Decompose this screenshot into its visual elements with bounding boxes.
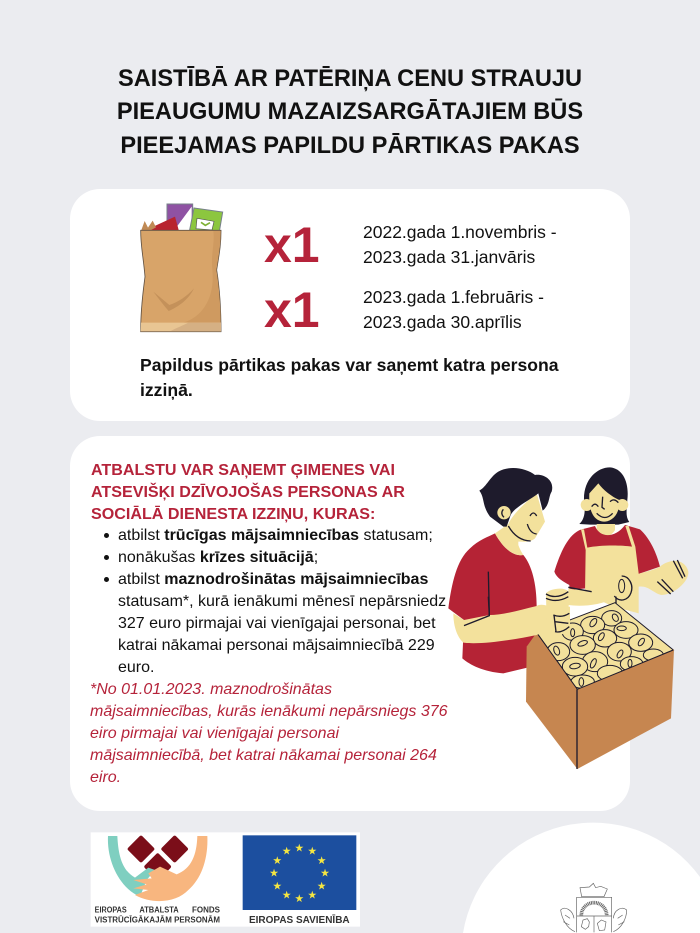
eligibility list: nonākušas krīzes situācijā; (118, 549, 318, 566)
eligibility list: statusam*, kurā ienākumi mēnesī nepārsniedz (118, 593, 446, 610)
logo: EU support fund and EU flag: ★ (295, 892, 304, 905)
note: one package per person: Papildus pārtikas pakas var saņemt katra persona (140, 355, 559, 375)
eligibility list: atbilst trūcīgas mājsaimniecības statusam; (118, 527, 433, 544)
footnote: eiro. (90, 769, 121, 786)
eligibility heading (91, 461, 405, 523)
date range second: 2023.gada 1.februāris - (363, 287, 544, 307)
panel: food packages (70, 189, 630, 421)
footnote: eiro pirmajai vai vienīgajai personai (90, 725, 339, 742)
woman (554, 467, 688, 613)
eligibility list: 327 euro pirmajai vai vienīgajai personai, bet (118, 615, 436, 632)
eligibility list: euro. (118, 659, 154, 676)
logo: EU support fund and EU flag: ★ (269, 867, 279, 880)
logo: EU support fund and EU flag: ATBALSTA (139, 906, 179, 915)
logo: EU support fund and EU flag: ★ (273, 879, 282, 892)
man (448, 468, 552, 673)
box of cans (537, 603, 673, 689)
eligibility heading: SOCIĀLĀ DIENESTA IZZIŅU, KURAS: (91, 505, 375, 523)
title: PIEEJAMAS PAPILDU PĀRTIKAS PAKAS (120, 132, 580, 158)
man's forearm and can (453, 589, 570, 643)
date range first: 2022.gada 1.novembris - (363, 222, 557, 242)
logo: EU support fund and EU flag: ★ (317, 879, 326, 892)
date range second: 2023.gada 30.aprīlis (363, 312, 522, 332)
eligibility list (104, 527, 446, 676)
title: SAISTĪBĀ AR PATĒRIŅA CENU STRAUJU (118, 66, 582, 92)
logo: EU support fund and EU flag: VISTRŪCĪGĀKAJĀM PERSONĀM (95, 916, 220, 925)
logo: EU support fund and EU flag: EIROPAS SAVIENĪBA (249, 914, 350, 926)
eligibility list: atbilst maznodrošinātas mājsaimniecības (118, 571, 428, 588)
logo: EU support fund and EU flag: ★ (320, 867, 330, 880)
title: PIEAUGUMU MAZAIZSARGĀTAJIEM BŪS (117, 99, 583, 125)
eligibility list: katrai nākamai personai mājsaimniecībā 229 (118, 637, 435, 654)
logo: EU support fund and EU flag: ★ (282, 845, 291, 858)
logo: EU support fund and EU flag: ★ (308, 889, 317, 902)
logo: EU support fund and EU flag: ★ (308, 845, 317, 858)
footnote: mājsaimniecībā, bet katrai nākamai personai 264 (90, 747, 437, 764)
date range second (363, 287, 544, 332)
eligibility heading: ATSEVIŠĶI DZĪVOJOŠAS PERSONAS AR (91, 483, 405, 501)
note: one package per person (140, 355, 559, 400)
panel: eligibility (70, 436, 630, 811)
footnote: *No 01.01.2023. maznodrošinātas (90, 681, 332, 698)
footnote (90, 681, 448, 786)
logo: EU support fund and EU flag: FONDS (192, 906, 221, 915)
logo: EU support fund and EU flag: EIROPAS (95, 906, 127, 915)
eligibility heading: ATBALSTU VAR SAŅEMT ĢIMENES VAI (91, 461, 395, 479)
logo: EU support fund and EU flag: ★ (317, 854, 326, 867)
date range first (363, 222, 557, 267)
logo: EU support fund and EU flag: ★ (295, 841, 304, 854)
note: one package per person: izziņā. (140, 380, 193, 400)
multiplier x1 first: x1 (264, 217, 320, 273)
date range first: 2023.gada 31.janvāris (363, 247, 535, 267)
logo: EU support fund and EU flag: ★ (282, 889, 291, 902)
footnote: mājsaimniecības, kurās ienākumi nepārsniegs 376 (90, 703, 448, 720)
title (117, 66, 583, 158)
logo: EU support fund and EU flag: ★ (273, 854, 282, 867)
multiplier x1 second: x1 (264, 282, 320, 338)
